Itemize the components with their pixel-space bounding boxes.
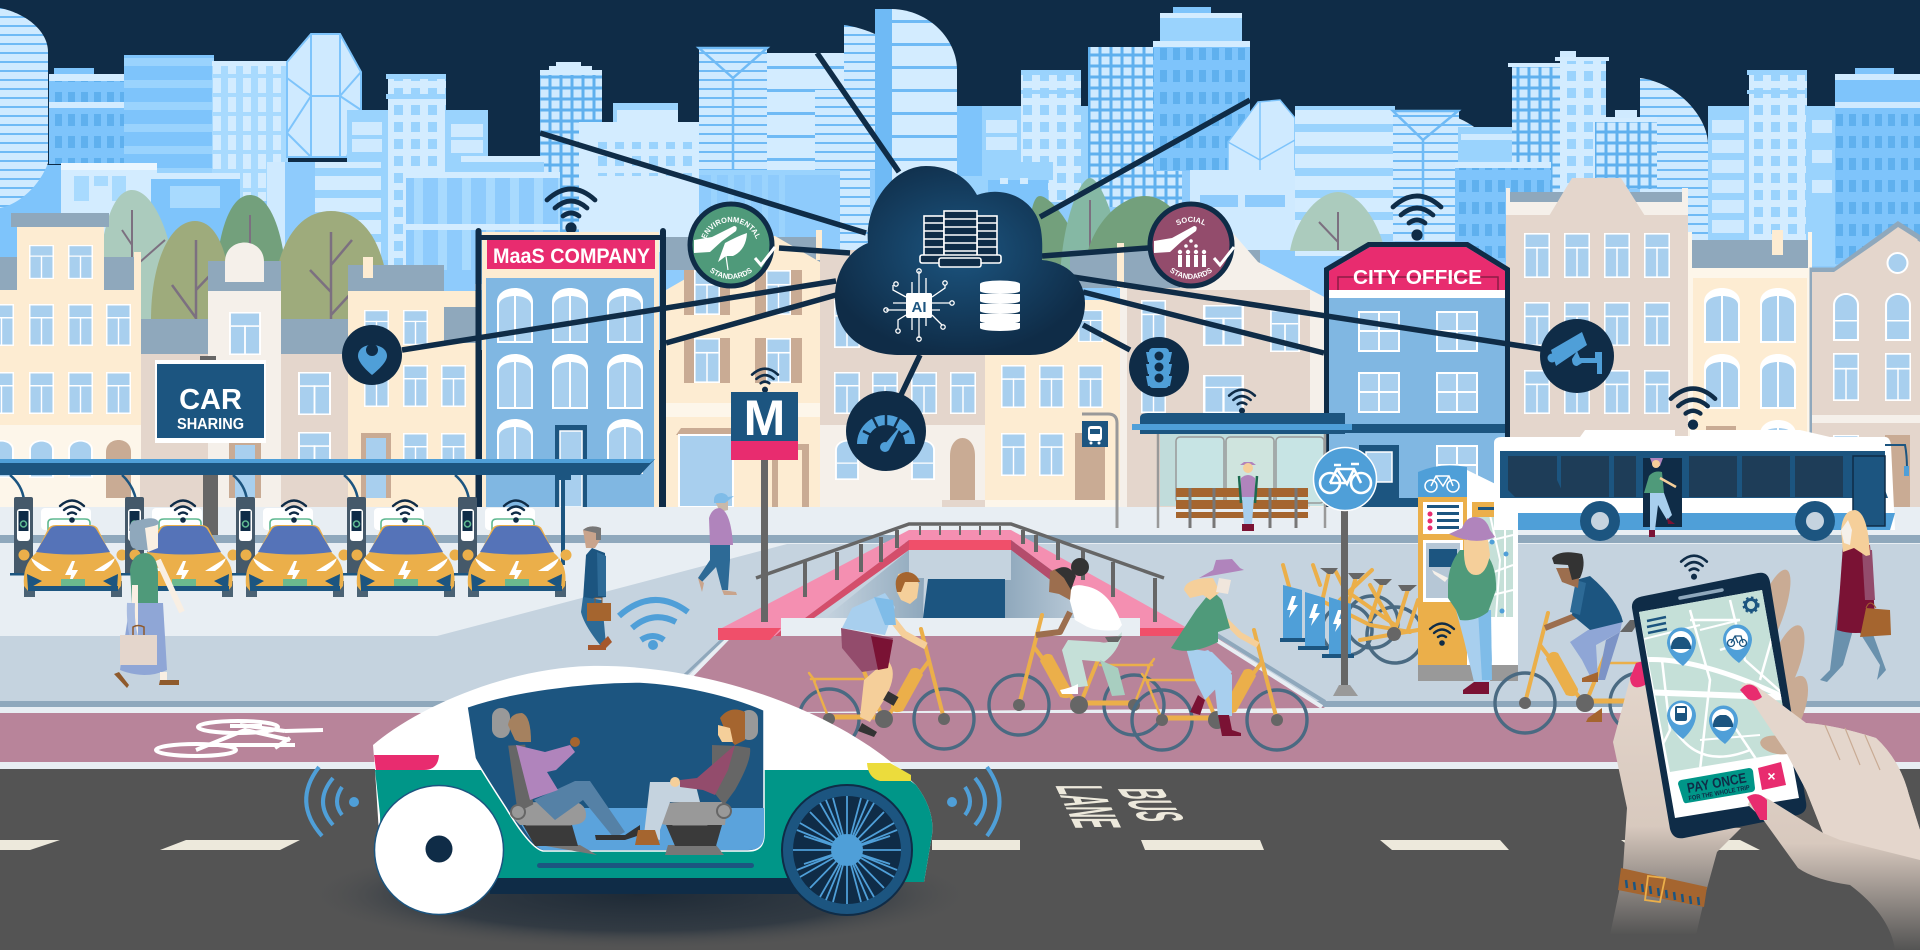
wifi: city office [1393, 196, 1441, 241]
house: cream arched windows [1688, 230, 1812, 510]
road text: bus lane [1040, 785, 1198, 828]
wifi: phone [1681, 556, 1707, 580]
person: boarding bus [1644, 458, 1676, 537]
icon: database [980, 280, 1020, 331]
house: left cream [0, 213, 141, 510]
icon: location pin [342, 325, 402, 385]
house: beige gabled beside city office [1070, 225, 1330, 510]
badge: social standards [1148, 202, 1235, 288]
settings icon [1744, 598, 1758, 612]
button: pay once: PAY ONCE [1686, 769, 1748, 796]
house: cream centre right [985, 300, 1120, 510]
button: pay once: FOR THE WHOLE TRIP [1688, 784, 1751, 802]
icon: cctv camera [1540, 319, 1614, 393]
house: far right gable [1812, 224, 1920, 512]
passenger: right [635, 710, 758, 855]
wifi: metro sign [752, 369, 778, 393]
icon: AI chip: AI [912, 299, 926, 316]
person: man with cap [698, 493, 737, 595]
hand holding phone [1610, 565, 1920, 950]
fingers behind phone [1741, 565, 1815, 749]
car sharing sign: SHARING [177, 416, 244, 433]
house: beige under cloud [820, 250, 986, 510]
pin: taxi [1709, 705, 1738, 744]
house: cream right of car sharing [348, 257, 476, 510]
thumb nail [1630, 662, 1649, 687]
cyclist: rider two [989, 558, 1164, 735]
bike lane marking [156, 721, 323, 756]
autonomous vehicle [373, 666, 932, 915]
watch [1618, 868, 1707, 907]
connection lines [402, 53, 1541, 395]
sign: city office: CITY OFFICE [1353, 267, 1482, 289]
metro sign: M [744, 390, 785, 446]
person: woman with handbag [1820, 510, 1891, 682]
badge: social standards: SOCIAL [1176, 216, 1205, 226]
passenger: left [492, 708, 640, 855]
road dashes [0, 840, 1760, 850]
cyclist: rider four [1495, 552, 1670, 733]
cyclist: rider one [799, 572, 974, 749]
pin: bike [1723, 624, 1752, 663]
road text: bus lane: BUS [1102, 788, 1198, 822]
charging canopy [0, 459, 655, 565]
bus [1494, 430, 1909, 541]
button: pay once [1678, 768, 1755, 803]
ground and pavements [0, 507, 1920, 950]
icon: servers [920, 211, 1001, 267]
left palm [1610, 663, 1741, 935]
house: centre white behind car sharing [140, 242, 349, 510]
vehicle window and cabin [467, 682, 764, 851]
badge: environmental standards: ENVIRONMENTAL [701, 216, 760, 240]
pin: car [1667, 627, 1696, 666]
metro entrance ramp [718, 524, 1191, 640]
car sharing sign: CAR [179, 384, 242, 416]
electric bike station [1280, 565, 1423, 663]
badge: environmental standards [688, 202, 776, 288]
rear wheel cover [374, 786, 504, 914]
bus shelter with person [1132, 413, 1352, 531]
person: man with briefcase [581, 526, 612, 650]
front wheel [782, 785, 912, 915]
map roads [1644, 600, 1782, 767]
button: cancel: × [1767, 768, 1776, 784]
metro sign [731, 390, 798, 622]
pin: bus [1667, 700, 1696, 739]
car sharing sign [155, 356, 266, 443]
bus stop sign [1082, 414, 1117, 528]
person: woman with tote [114, 518, 182, 688]
wifi: above bus [1671, 389, 1715, 430]
icon: speed gauge [846, 391, 926, 471]
cloud hub [835, 166, 1085, 355]
button: cancel [1758, 762, 1786, 790]
house: large beige right of city office [1506, 178, 1688, 510]
wifi: skyline above MaaS company [547, 189, 595, 234]
building: MaaS company [476, 231, 666, 512]
vehicle sensor signal: front [947, 767, 1000, 836]
sign: MaaS company: MaaS COMPANY [493, 245, 650, 268]
wifi: above shelter [1229, 390, 1255, 414]
large wifi signal [619, 600, 688, 650]
menu icon [1647, 617, 1667, 633]
vehicle shadow [305, 840, 975, 950]
electric cars row [10, 497, 572, 597]
vehicle sensor signal: rear [306, 767, 359, 836]
skyline: distant towers [0, 7, 1920, 350]
icon: traffic light [1129, 337, 1189, 397]
building: city office [1324, 242, 1510, 510]
cyclist: rider three [1132, 559, 1307, 750]
badge: social standards: STANDARDS [1170, 268, 1212, 279]
icon: AI chip [884, 269, 954, 341]
trees: left group [97, 190, 390, 320]
house: cream with shutters [666, 230, 822, 510]
ticket kiosk [1418, 465, 1518, 681]
phone body [1632, 573, 1806, 838]
person: waiting at shelter [1239, 462, 1257, 531]
cycle plaza [647, 632, 1325, 713]
trees: centre right group [1020, 178, 1385, 280]
person: woman at kiosk [1432, 517, 1496, 694]
road text: bus lane: LANE [1040, 785, 1134, 828]
badge: environmental standards: STANDARDS [710, 268, 752, 279]
right hand [1740, 683, 1920, 950]
bike route sign [1314, 448, 1376, 696]
